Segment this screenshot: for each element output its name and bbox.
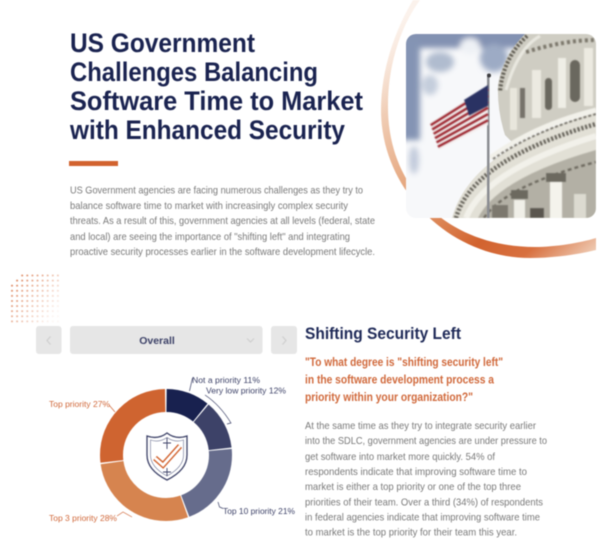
title: with Enhanced Security — [69, 115, 345, 145]
intro paragraph: and local) are seeing the importance of "shifting left" and integrating — [70, 232, 350, 243]
survey question — [305, 355, 503, 404]
body paragraph: market is either a top priority or one of the top three — [305, 482, 521, 493]
dropdown: Overall — [70, 326, 262, 354]
title — [69, 28, 363, 145]
title: US Government — [70, 28, 255, 58]
body paragraph: At the same time as they try to integrate security earlier — [305, 421, 536, 432]
label: Not a priority 11% — [190, 375, 260, 391]
next button — [271, 326, 297, 354]
flagpole — [487, 74, 490, 218]
survey question: priority within your organization?" — [305, 390, 473, 404]
body paragraph: to market is the top priority for their team this year. — [305, 528, 517, 538]
body paragraph — [305, 421, 547, 538]
heading: Shifting Security Left: Shifting Security Left — [305, 324, 461, 343]
american flag — [430, 85, 488, 150]
title: Challenges Balancing — [70, 57, 318, 87]
icon: shield with check mark — [147, 433, 187, 480]
label: Very low priority 12% — [205, 386, 286, 424]
intro paragraph — [70, 186, 375, 258]
label: Top 3 priority 28%: Top 3 priority 28% — [49, 513, 117, 523]
dome lower band and cornice — [452, 112, 596, 218]
intro paragraph: US Government agencies are facing numerous challenges as they try to — [70, 186, 363, 196]
intro paragraph: threats. As a result of this, government agencies at all levels (federal, state — [70, 216, 375, 227]
body paragraph: priorities of their team. Over a third (34%) of respondents — [305, 498, 543, 508]
dropdown: Overall: Overall — [139, 335, 175, 347]
dome upper drum — [498, 34, 596, 142]
body paragraph: respondents indicate that improving software time to — [305, 467, 527, 478]
label: Top 10 priority 21%: Top 10 priority 21% — [223, 506, 295, 516]
label: Top priority 27%: Top priority 27% — [49, 399, 110, 409]
survey question: "To what degree is "shifting security left" — [305, 355, 503, 369]
survey question: in the software development process a — [305, 372, 494, 386]
previous button — [36, 326, 62, 354]
title: Software Time to Market — [70, 86, 363, 116]
body paragraph: get software into market more quickly. 54% of — [305, 452, 495, 463]
label: Not a priority 11%: Not a priority 11% — [192, 375, 260, 385]
title accent bar — [69, 161, 118, 166]
decorative ring behind photo — [381, 0, 596, 258]
carousel controls — [36, 326, 297, 354]
intro paragraph: proactive security processes earlier in the software development lifecycle. — [70, 247, 375, 258]
photo: US Capitol dome and flag — [400, 28, 596, 220]
body paragraph: in federal agencies indicate that improving software time — [305, 512, 540, 524]
label: Top 10 priority 21% — [218, 502, 295, 516]
intro paragraph: balance software time to market with increasingly complex security — [70, 201, 349, 212]
body paragraph: into the SDLC, government agencies are under pressure to — [305, 436, 547, 447]
label: Very low priority 12%: Very low priority 12% — [206, 386, 286, 396]
donut chart — [112, 400, 220, 510]
decorative dot grid — [10, 274, 59, 324]
